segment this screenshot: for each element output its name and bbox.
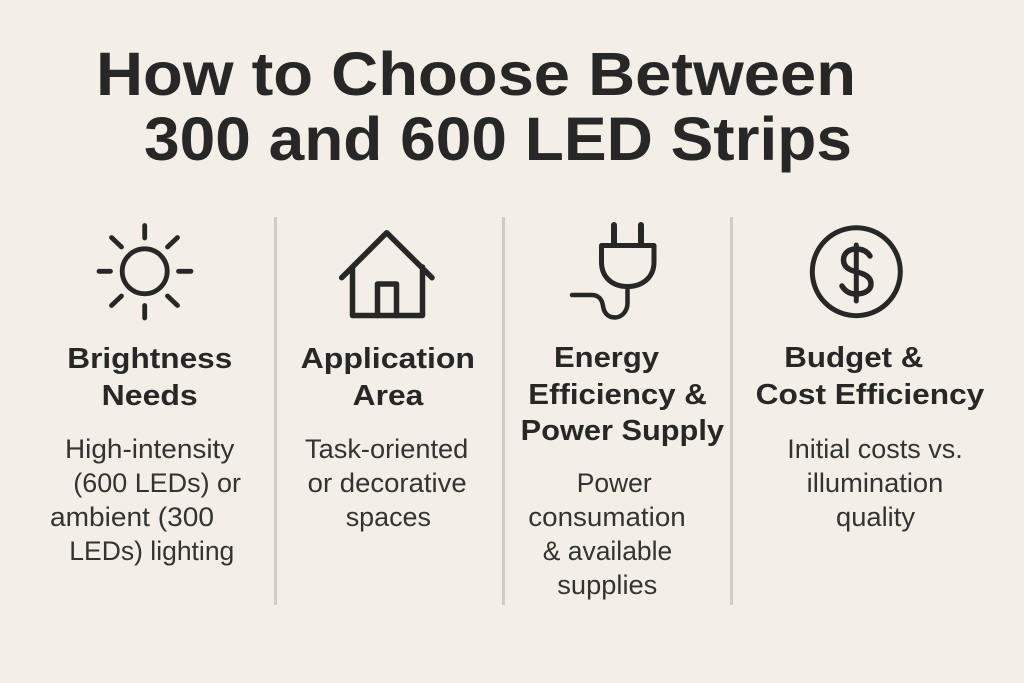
text: budget description: illumination [807, 468, 943, 498]
heading: application area: Application [301, 343, 475, 375]
heading: brightness needs [67, 343, 232, 412]
panel: brightness needs [50, 226, 241, 566]
heading: budget and cost efficiency [756, 342, 984, 411]
text: brightness description: High-intensity [65, 434, 235, 464]
heading: energy efficiency and power supply [521, 342, 724, 447]
icon: house [342, 233, 432, 316]
title: How to Choose Between [96, 40, 856, 108]
panel: budget and cost efficiency [756, 228, 984, 532]
panel: application area [301, 233, 475, 532]
heading: brightness needs: Needs [102, 380, 198, 412]
heading: energy efficiency and power supply: Efficiency & [528, 379, 707, 411]
heading: budget and cost efficiency: Cost Efficiency [756, 379, 984, 411]
text: brightness description: ambient (300 [50, 502, 214, 532]
text: budget description: quality [836, 502, 916, 532]
text: brightness description: (600 LEDs) or [73, 468, 241, 498]
text: energy description [528, 468, 686, 600]
title: 300 and 600 LED Strips [144, 105, 852, 173]
text: energy description: supplies [557, 570, 657, 600]
icon: sun [99, 226, 191, 318]
heading: application area: Area [353, 380, 424, 412]
text: energy description: & available [543, 536, 672, 566]
text: application description: spaces [346, 502, 431, 532]
text: brightness description: LEDs) lighting [69, 536, 234, 566]
icon: dollar coin [812, 228, 900, 316]
text: application description: or decorative [308, 468, 467, 498]
heading: budget and cost efficiency: Budget & [784, 342, 923, 374]
title [96, 40, 856, 173]
text: budget description [787, 434, 963, 532]
text: energy description: consumation [528, 502, 686, 532]
panel: energy efficiency [521, 225, 724, 600]
text: brightness description [50, 434, 241, 566]
heading: energy efficiency and power supply: Energy [554, 342, 659, 374]
text: budget description: Initial costs vs. [787, 434, 963, 464]
text: energy description: Power [577, 468, 652, 498]
text: application description [305, 434, 468, 532]
text: application description: Task-oriented [305, 434, 468, 464]
icon: plug [572, 225, 654, 318]
heading: application area [301, 343, 475, 412]
heading: brightness needs: Brightness [67, 343, 232, 375]
heading: energy efficiency and power supply: Power Supply [521, 415, 724, 447]
